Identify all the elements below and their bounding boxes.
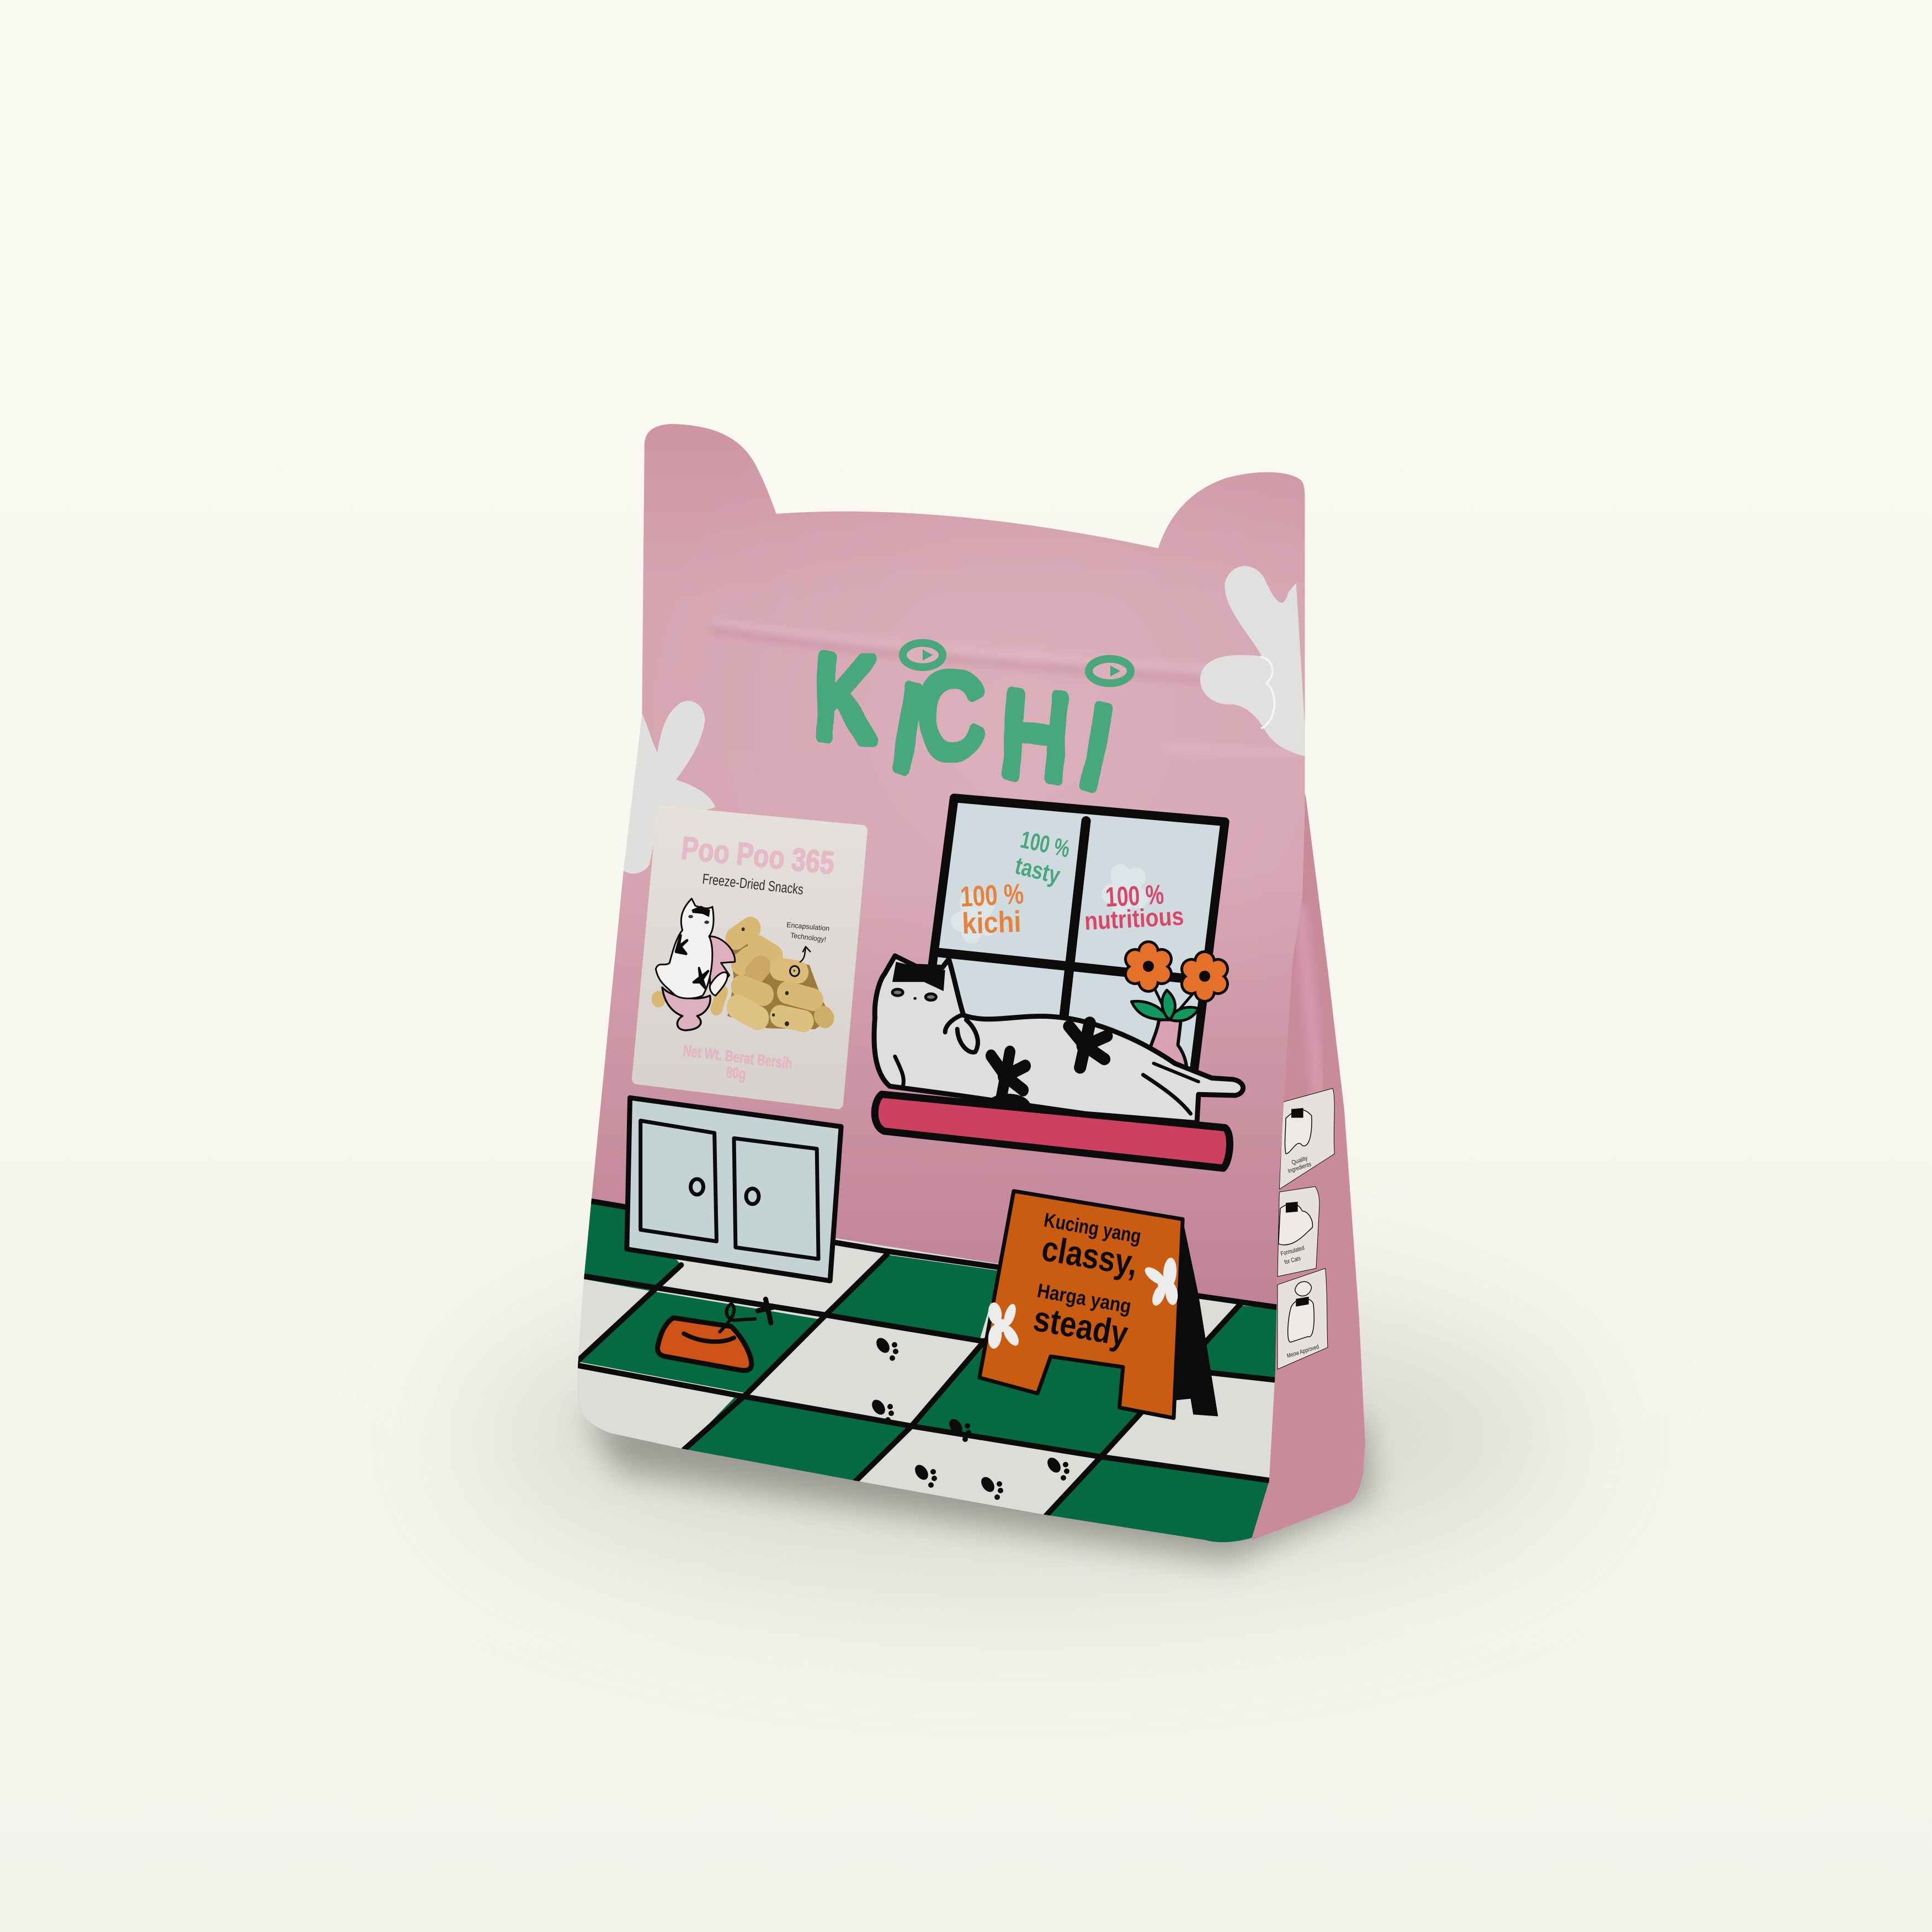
a-frame sign bbox=[980, 1191, 1218, 1418]
towel bbox=[709, 936, 735, 987]
cat hair patch bbox=[892, 962, 945, 991]
badge captions: Meow Approved bbox=[1286, 1344, 1320, 1360]
tear notch bbox=[1260, 657, 1274, 728]
pouch bbox=[578, 424, 1365, 1542]
window copy: kichi bbox=[961, 905, 1021, 940]
label copy: 80g bbox=[725, 1063, 747, 1083]
sign copy: Kucing yang bbox=[1042, 1209, 1143, 1248]
cat spot base bbox=[983, 1094, 1032, 1111]
window copy: tasty bbox=[1013, 852, 1063, 890]
window glass and frame bbox=[922, 798, 1225, 1077]
side panel badges bbox=[1278, 1088, 1334, 1369]
sign back leg bbox=[1174, 1219, 1218, 1417]
badge captions: Quality bbox=[1291, 1155, 1309, 1166]
label cat bbox=[656, 898, 735, 1030]
window bbox=[922, 798, 1225, 1077]
label copy: Technology! bbox=[790, 931, 827, 944]
wall bbox=[578, 424, 1305, 1514]
paw prints bbox=[869, 1335, 1069, 1500]
window copy bbox=[960, 826, 1184, 940]
floor base bbox=[520, 1189, 1344, 1598]
front panel bbox=[578, 424, 1305, 1542]
eye left bbox=[903, 643, 943, 667]
label card bbox=[637, 811, 862, 1104]
badge: meow approved bbox=[1278, 1268, 1328, 1369]
sign board bbox=[980, 1191, 1183, 1418]
logo bbox=[811, 629, 1131, 815]
stems bbox=[1151, 981, 1196, 1020]
floral decal: left bbox=[618, 701, 716, 874]
lounging cat bbox=[874, 956, 1243, 1123]
zipper crease bbox=[712, 621, 1302, 753]
badge: formulated for cats bbox=[1278, 1186, 1319, 1276]
side gusset highlight bbox=[1300, 905, 1319, 1115]
green tiles bbox=[562, 1195, 1301, 1577]
badge captions: for Cats bbox=[1284, 1255, 1302, 1266]
vase bbox=[1146, 1019, 1187, 1086]
cabinet knobs bbox=[691, 1179, 704, 1195]
cabinet doors bbox=[641, 1121, 716, 1242]
floral decal: right bbox=[1200, 566, 1307, 757]
label copy: Encapsulation bbox=[786, 920, 830, 933]
eye right bbox=[1089, 659, 1131, 683]
capsule marker bbox=[790, 966, 799, 976]
cabinet bbox=[627, 1098, 841, 1281]
flower vase bbox=[1131, 951, 1218, 1086]
wordmark: KICHI bbox=[811, 629, 1121, 815]
toilet bbox=[662, 987, 710, 1030]
ground shadow bbox=[469, 1280, 1573, 1589]
window copy: nutritious bbox=[1084, 902, 1184, 935]
leaves bbox=[1131, 1001, 1168, 1020]
cat arm bbox=[945, 1015, 978, 1052]
sign copy bbox=[1031, 1209, 1143, 1354]
sign copy: classy, bbox=[1039, 1228, 1141, 1284]
label copy: Freeze-Dried Snacks bbox=[701, 870, 805, 898]
window copy: 100 % bbox=[1105, 879, 1164, 913]
sign flower upper bbox=[1142, 1257, 1179, 1307]
badge captions: Formulated bbox=[1280, 1245, 1305, 1258]
arrow bbox=[800, 946, 810, 962]
badge captions: Ingredients bbox=[1287, 1161, 1312, 1175]
cat body bbox=[874, 956, 1243, 1123]
floor grid lines bbox=[568, 1198, 1301, 1522]
window seat cushion bbox=[875, 1094, 1230, 1168]
label copy: Poo Poo 365 bbox=[680, 830, 836, 881]
product label bbox=[637, 811, 862, 1104]
food bowl bbox=[657, 1299, 774, 1370]
label copy bbox=[680, 830, 836, 1083]
sign copy: Harga yang bbox=[1036, 1279, 1133, 1318]
sign copy: steady bbox=[1031, 1298, 1131, 1354]
snack pile bbox=[658, 928, 832, 1029]
window copy: 100 % bbox=[960, 878, 1024, 913]
sign flower lower bbox=[987, 1302, 1022, 1349]
label copy: Net Wt. Berat Bersih bbox=[682, 1042, 794, 1072]
cat spot lower bbox=[991, 1052, 1025, 1099]
side gusset bbox=[1252, 789, 1365, 1540]
faint window flowers bbox=[961, 874, 1139, 934]
cat face bbox=[892, 989, 903, 996]
orange flowers bbox=[1135, 951, 1162, 982]
badge captions bbox=[1280, 1155, 1320, 1360]
cat body bbox=[656, 898, 714, 998]
window copy: 100 % bbox=[1018, 826, 1072, 863]
floor bbox=[520, 1189, 1344, 1598]
badge: quality ingredients bbox=[1279, 1088, 1334, 1189]
cat spot upper bbox=[1069, 1023, 1107, 1068]
